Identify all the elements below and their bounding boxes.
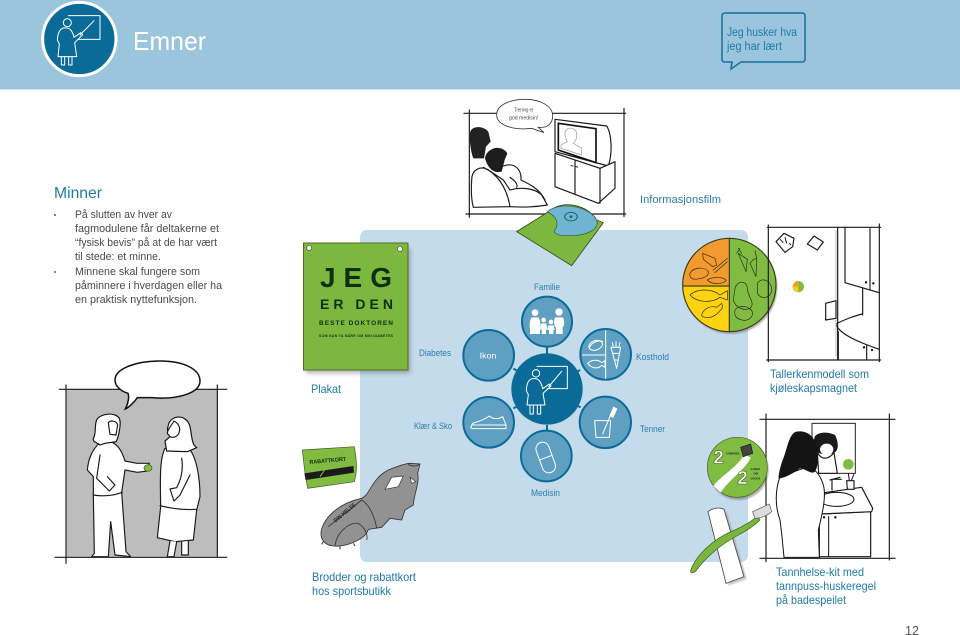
dental rule badge: 2 [713, 446, 724, 467]
discount card: RABATTKORT [309, 457, 347, 466]
speech bubble [115, 361, 200, 409]
dental rule badge: DAGEN [751, 476, 760, 480]
text block: Minner [54, 185, 223, 306]
labels around wheel: Medisin [531, 488, 560, 499]
dental rule badge: 2 [737, 467, 748, 488]
illustration: fridge [767, 224, 881, 362]
man's hair [485, 148, 507, 172]
labels around wheel [414, 282, 669, 499]
dental rule badge: GANGER [751, 467, 760, 471]
labels around wheel: Diabetes [419, 348, 451, 359]
labels around wheel: Tenner [640, 424, 665, 435]
icon: shoe [463, 397, 514, 448]
poster: Jeg er den beste doktoren: JEG [320, 262, 392, 293]
label: Tallerkenmodell som kjøleskapsmagnet [770, 367, 869, 395]
speech bubble: Trening er god medisin: Trening er [514, 108, 533, 114]
text block: Minner: fagmodulene får deltakerne et [75, 223, 219, 235]
label: Tannhelse-kit: på badespeilet [776, 593, 847, 607]
panel: light blue background [360, 230, 748, 562]
label: Ikon circle [463, 330, 514, 381]
icon: food plate [580, 329, 631, 380]
illustration: couple watching TV [464, 99, 626, 266]
illustration: plate model [683, 224, 881, 362]
text block: Minner: På slutten av hver av [75, 209, 172, 221]
text block: Minner: Minner [54, 185, 103, 202]
icon: teacher badge [43, 2, 116, 76]
dental rule badge: TANNKREM [726, 452, 740, 456]
illustration: bathroom mirror and dental kit [691, 414, 895, 586]
icon: toothbrush in glass [580, 397, 631, 448]
text block: Minner: til stede: et minne. [75, 251, 161, 263]
labels around wheel: Familie [534, 282, 560, 293]
label: Tallerkenmodell som kjøleskapsmagnet: Tallerkenmodell som [770, 367, 869, 381]
callout: Jeg husker hva jeg har lært: jeg har lært [726, 41, 783, 53]
toothpaste tube [708, 508, 747, 586]
TV [555, 119, 615, 203]
label: Brodder og rabattkort hos sportsbutikk: hos sportsbutikk [312, 584, 392, 598]
label: Ikon circle: Ikon [480, 350, 497, 360]
woman on sofa [470, 127, 491, 158]
callout: Jeg husker hva jeg har lært: Jeg husker hva [727, 27, 798, 39]
sofa and bodies [471, 168, 547, 207]
illustration: cleats and discount card [302, 447, 420, 549]
disc sleeve [517, 205, 603, 266]
center teacher icon [511, 353, 583, 425]
icon: pill [521, 431, 572, 481]
label: Brodder og rabattkort hos sportsbutikk: Brodder og rabattkort [312, 570, 417, 584]
labels around wheel: Kosthold [636, 352, 669, 363]
dental rule badge: OM [753, 472, 759, 476]
food doodles [690, 253, 727, 283]
toothbrush [691, 504, 772, 573]
speech bubble: Trening er god medisin [497, 99, 553, 133]
label: Tannhelse-kit: Tannhelse-kit med [776, 565, 864, 579]
illustration: two women talking [55, 361, 227, 563]
callout: Jeg husker hva jeg har lært [722, 13, 805, 69]
label: Tannhelse-kit [776, 565, 876, 607]
label: Tannhelse-kit: tannpuss-huskeregel [776, 579, 876, 593]
header band [0, 0, 960, 90]
label: Tallerkenmodell som kjøleskapsmagnet: kjøleskapsmagnet [770, 381, 858, 395]
speech bubble: Trening er god medisin: god medisin! [509, 115, 539, 121]
bathroom [760, 414, 895, 562]
woman left [87, 414, 152, 557]
poster: Jeg er den beste doktoren: ER DEN [320, 296, 393, 312]
labels around wheel: Klær & Sko [414, 421, 452, 432]
text block: Minner: Minnene skal fungere som [75, 266, 200, 278]
poster: Jeg er den beste doktoren [304, 243, 410, 373]
title: Emner [133, 26, 206, 56]
label: Plakat: Plakat [311, 382, 342, 396]
label: Brodder og rabattkort hos sportsbutikk [312, 570, 417, 598]
cleat: DIN HELSE [333, 502, 358, 524]
poster: Jeg er den beste doktoren: SOM KAN TA NÅRE OM MIN DIABETES [319, 333, 394, 338]
text block: Minner: “fysisk bevis” på at de har vært [75, 237, 217, 249]
icon wheel [463, 297, 631, 481]
text block: Minner: påminnere i hverdagen eller ha [75, 280, 223, 292]
poster: Jeg er den beste doktoren: BESTE DOKTOREN [319, 320, 393, 327]
label: Informasjonsfilm: Informasjonsfilm [640, 194, 721, 206]
icon: family [522, 297, 572, 347]
dental rule badge [707, 437, 769, 500]
text block: Minner: en praktisk nyttefunksjon. [75, 294, 197, 306]
woman right [157, 417, 200, 557]
